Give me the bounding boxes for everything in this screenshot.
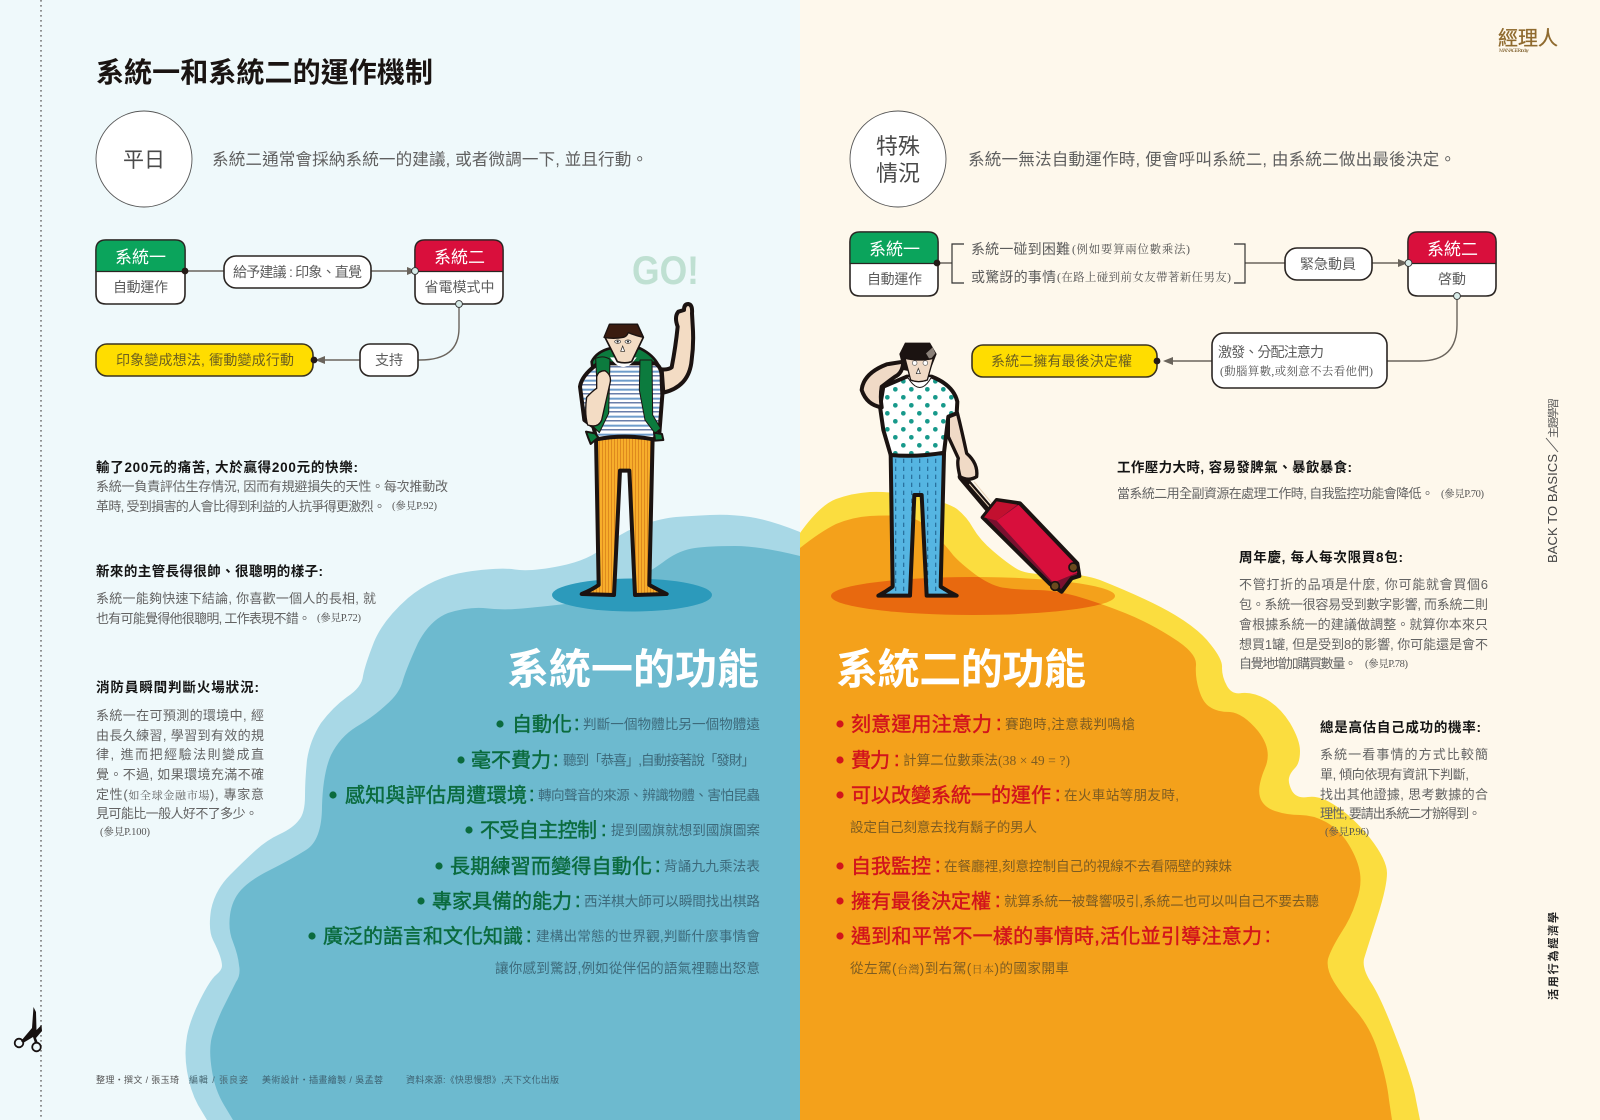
item: knowledge: 讓你感到驚訝,例如從伴侶的語氣裡聽出怒意 bbox=[495, 960, 760, 976]
item: involuntary: 不受自主控制 bbox=[480, 819, 597, 842]
item: final say: 就算系統一被聲響吸引,系統二也可以叫自己不要去聽 bbox=[1004, 893, 1319, 909]
item: perception: 轉向聲音的來源、辨識物體、害怕昆蟲 bbox=[538, 787, 760, 803]
item: practice bbox=[435, 855, 760, 878]
text: difficulty conditions: (在路上碰到前女友帶著新任男友) bbox=[1057, 270, 1231, 284]
illustration: hiker bbox=[580, 304, 693, 595]
text: stress: (參見P.70) bbox=[1441, 487, 1484, 500]
item: effortless bbox=[457, 749, 755, 772]
blob: system one outer bbox=[186, 515, 800, 1120]
text: overestimation: 單, 傾向依現有資訊下判斷, bbox=[1320, 767, 1469, 782]
text: firefighter: 覺。不過, 如果環境充滿不確 bbox=[96, 767, 264, 782]
item: automation: 判斷一個物體比另一個物體遠 bbox=[583, 717, 760, 732]
box: system one: 系統一 bbox=[115, 248, 166, 267]
bracket left bbox=[952, 244, 964, 283]
text: stress bbox=[1117, 459, 1484, 501]
text: difficulty conditions: 或驚訝的事情 bbox=[971, 269, 1056, 285]
box: system one: 自動運作 bbox=[113, 279, 168, 295]
credits: 整理‧撰文 / 張玉琦 bbox=[96, 1074, 179, 1085]
item: change system one: 設定自己刻意去找有鬍子的男人 bbox=[850, 819, 1037, 835]
text: stress: 當系統二用全副資源在處理工作時, 自我監控功能會降低。 bbox=[1117, 486, 1434, 501]
item: involuntary: : bbox=[601, 819, 607, 841]
side label: back to basics bbox=[1545, 398, 1560, 563]
item: automation: : bbox=[574, 713, 580, 735]
item: change system one: : bbox=[1055, 784, 1061, 806]
icon: special circle: 特殊 bbox=[876, 134, 920, 159]
credits: 美術設計‧插畫繪製 / 吳孟蓉 bbox=[262, 1074, 383, 1085]
text: purchase limit bbox=[1239, 549, 1488, 671]
box: allocate attention bbox=[1212, 333, 1387, 388]
item: automation: 自動化 bbox=[512, 713, 572, 736]
item: knowledge bbox=[308, 925, 760, 976]
side label: behavioral economics: 活用行為經濟學 bbox=[1546, 912, 1560, 1000]
item: effortless: 毫不費力 bbox=[471, 749, 551, 772]
text: special description: 系統一無法自動運作時, 便會呼叫系統二, 由系統二做出最後決定。 bbox=[968, 150, 1456, 169]
text: overestimation: 理性, 要請出系統二才辦得到。 bbox=[1320, 806, 1481, 821]
item: practice: : bbox=[655, 855, 661, 877]
blob: system one inner bbox=[210, 546, 800, 1120]
text: overestimation bbox=[1320, 719, 1488, 838]
item: expertise: 專家具備的能力 bbox=[432, 890, 572, 913]
side label: back to basics: BACK TO BASICS bbox=[1545, 454, 1560, 563]
pill: advice bbox=[224, 256, 371, 288]
item: effort: 費力 bbox=[851, 749, 890, 772]
box: system one bbox=[96, 240, 188, 304]
list: system one functions bbox=[308, 713, 760, 976]
text: loss aversion: 輸了200元的痛苦, 大於贏得200元的快樂: bbox=[96, 459, 358, 475]
text: overestimation: 總是高估自己成功的機率: bbox=[1320, 719, 1481, 735]
item: unusual events: 遇到和平常不一樣的事情時,活化並引導注意力 bbox=[851, 925, 1262, 948]
text: loss aversion: 系統一負責評估生存情況, 因而有規避損失的天性。每次推動改 bbox=[96, 479, 448, 494]
item: deliberate attention: 刻意運用注意力 bbox=[851, 713, 992, 736]
text: overestimation: 系統一看事情的方式比較簡 bbox=[1320, 747, 1488, 762]
credits: 資料來源:《快思慢想》,天下文化出版 bbox=[406, 1074, 559, 1085]
pill: impression becomes action bbox=[96, 344, 317, 376]
box: system two bbox=[412, 240, 503, 307]
item: unusual events: : bbox=[1265, 925, 1271, 947]
item: final say bbox=[836, 890, 1319, 913]
box: system two: 啓動 bbox=[1438, 271, 1466, 287]
icon: special circle bbox=[850, 111, 946, 207]
heading: GO: GO! bbox=[632, 249, 699, 293]
title: 系統一和系統二的運作機制 bbox=[96, 57, 433, 88]
box: allocate attention: 激發、分配注意力 bbox=[1218, 344, 1324, 360]
item: final say: : bbox=[995, 890, 1001, 912]
icon: weekday circle bbox=[96, 111, 192, 207]
text: purchase limit: 會根據系統一的建議做調整。就算你本來只 bbox=[1239, 617, 1488, 632]
credits bbox=[96, 1074, 559, 1085]
box: allocate attention: (動腦算數,或刻意不去看他們) bbox=[1220, 364, 1373, 378]
pill: advice: 給予建議 : 印象、直覺 bbox=[233, 264, 362, 280]
item: effortless: : bbox=[553, 749, 559, 771]
pill: impression becomes action: 印象變成想法, 衝動變成行動 bbox=[116, 352, 294, 368]
pill: support bbox=[360, 344, 418, 376]
item: involuntary bbox=[465, 819, 760, 842]
pill: support: 支持 bbox=[375, 352, 403, 368]
text: purchase limit: (參見P.78) bbox=[1365, 657, 1408, 670]
item: effort: (38 × 49 = ?) bbox=[998, 753, 1070, 769]
text: difficulty conditions bbox=[971, 241, 1231, 285]
logo: MANAGER today bbox=[1499, 48, 1529, 54]
flowchart: special bbox=[850, 232, 1496, 388]
item: deliberate attention: 賽跑時,注意裁判鳴槍 bbox=[1005, 716, 1135, 732]
text: new manager: 新來的主管長得很帥、很聰明的樣子: bbox=[96, 563, 323, 579]
text: difficulty conditions: (例如要算兩位數乘法) bbox=[1072, 242, 1190, 256]
list: system two functions bbox=[836, 713, 1319, 976]
text: purchase limit: 不管打折的品項是什麼, 你可能就會買個6 bbox=[1239, 577, 1488, 592]
text: firefighter: 見可能比一般人好不了多少。 bbox=[96, 806, 258, 821]
box: system two: 省電模式中 bbox=[424, 279, 494, 295]
item: change system one: 在火車站等朋友時, bbox=[1064, 787, 1179, 803]
pill: final decision: 系統二擁有最後決定權 bbox=[991, 353, 1132, 369]
text: firefighter: (參見P.100) bbox=[100, 825, 150, 838]
box: system one bbox=[850, 232, 940, 296]
item: involuntary: 提到國旗就想到國旗圖案 bbox=[611, 823, 760, 838]
item: self monitoring: 自我監控 bbox=[851, 855, 931, 878]
text: firefighter: 由長久練習, 學習到有效的規 bbox=[96, 728, 264, 743]
item: knowledge: 廣泛的語言和文化知識 bbox=[323, 925, 523, 948]
cut line bbox=[40, 0, 42, 1120]
flowchart: weekday bbox=[96, 240, 503, 376]
item: expertise bbox=[417, 890, 760, 913]
item: effortless: 聽到「恭喜」,自動接著說「發財」 bbox=[563, 752, 755, 768]
text: difficulty conditions: 系統一碰到困難 bbox=[971, 241, 1070, 257]
item: change system one: 可以改變系統一的運作 bbox=[851, 784, 1051, 807]
item: perception bbox=[329, 784, 760, 807]
text: new manager: (參見P.72) bbox=[317, 611, 362, 624]
heading: system two functions: 系統二的功能 bbox=[836, 646, 1086, 693]
text: firefighter: 律, 進而把經驗法則變成直 bbox=[96, 747, 264, 762]
text: weekday description: 系統二通常會採納系統一的建議, 或者微調一下, 並且行動。 bbox=[212, 150, 648, 169]
icon: special circle: 情況 bbox=[876, 161, 920, 186]
pill: mobilize: 緊急動員 bbox=[1300, 256, 1356, 272]
item: knowledge: 建構出常態的世界觀,判斷什麼事情會 bbox=[536, 928, 760, 944]
box: system one: 自動運作 bbox=[867, 271, 922, 287]
item: self monitoring: : bbox=[935, 855, 941, 877]
item: practice: 長期練習而變得自動化 bbox=[450, 855, 652, 878]
logo: 經理人 bbox=[1498, 27, 1558, 50]
text: loss aversion: (參見P.92) bbox=[392, 499, 438, 512]
side label: back to basics: 主題學習 bbox=[1547, 398, 1560, 438]
item: perception: : bbox=[529, 784, 535, 806]
connector lines bbox=[185, 271, 459, 360]
item: self monitoring: 在餐廳裡,刻意控制自己的視線不去看隔壁的辣妹 bbox=[944, 858, 1232, 874]
item: effort: 計算二位數乘法 bbox=[903, 753, 998, 768]
item: effort bbox=[836, 749, 1070, 772]
box: system two: 系統二 bbox=[434, 248, 485, 267]
item: perception: 感知與評估周遭環境 bbox=[345, 784, 527, 807]
text: firefighter bbox=[96, 679, 264, 838]
item: deliberate attention bbox=[836, 713, 1135, 736]
item: expertise: 西洋棋大師可以瞬間找出棋路 bbox=[584, 894, 760, 909]
text: overestimation: 找出其他證據, 思考數據的合 bbox=[1320, 787, 1488, 802]
item: knowledge: : bbox=[526, 925, 532, 947]
text: purchase limit: 包。系統一很容易受到數字影響, 而系統二則 bbox=[1239, 597, 1488, 612]
text: firefighter: 系統一在可預測的環境中, 經 bbox=[96, 708, 264, 723]
pill: final decision bbox=[972, 345, 1160, 377]
text: purchase limit: 想買1罐, 但是受到8的影響, 你可能還是會不 bbox=[1239, 637, 1488, 652]
item: unusual events bbox=[836, 925, 1271, 976]
item: expertise: : bbox=[575, 890, 581, 912]
text: new manager: 系統一能夠快速下結論, 你喜歡一個人的長相, 就 bbox=[96, 591, 376, 606]
text: stress: 工作壓力大時, 容易發脾氣、暴飲暴食: bbox=[1117, 459, 1352, 475]
ellipse: person shadow left bbox=[552, 578, 712, 612]
connector lines bbox=[938, 263, 1457, 361]
bracket right bbox=[1234, 244, 1245, 283]
box: system two: 系統二 bbox=[1427, 240, 1478, 259]
item: effort: : bbox=[894, 749, 900, 771]
text: firefighter: 消防員瞬間判斷火場狀況: bbox=[96, 679, 259, 695]
text: firefighter: 定性(如全球金融市場), 專家意 bbox=[96, 787, 264, 802]
text: new manager: 也有可能覺得他很聰明, 工作表現不錯。 bbox=[96, 611, 311, 626]
item: change system one bbox=[836, 784, 1179, 835]
heading: system one functions: 系統一的功能 bbox=[507, 646, 759, 693]
item: deliberate attention: : bbox=[996, 713, 1002, 735]
credits: 編輯 / 張良姿 bbox=[189, 1074, 248, 1085]
text: loss aversion: 革時, 受到損害的人會比得到利益的人抗爭得更激烈。 bbox=[96, 499, 386, 514]
item: final say: 擁有最後決定權 bbox=[851, 890, 991, 913]
box: system two bbox=[1405, 232, 1496, 299]
item: self monitoring bbox=[836, 855, 1232, 878]
item: practice: 背誦九九乘法表 bbox=[664, 859, 760, 874]
icon: weekday circle: 平日 bbox=[123, 149, 165, 172]
blob: system two outer bbox=[800, 492, 1420, 1120]
pill: mobilize bbox=[1285, 248, 1372, 280]
text: purchase limit: 自覺地增加購買數量。 bbox=[1239, 656, 1357, 671]
blob: system two inner bbox=[800, 516, 1392, 1120]
text: purchase limit: 周年慶, 每人每次限買8包: bbox=[1239, 549, 1403, 565]
item: automation bbox=[496, 713, 760, 736]
text: overestimation: (參見P.96) bbox=[1325, 825, 1370, 838]
text: new manager bbox=[96, 563, 376, 626]
text: loss aversion bbox=[96, 459, 448, 514]
icon: scissors bbox=[15, 1007, 42, 1051]
ellipse: person shadow right bbox=[831, 577, 1115, 615]
illustration: traveler bbox=[862, 343, 1079, 596]
box: system one: 系統一 bbox=[869, 240, 920, 259]
panel: right background bbox=[800, 0, 1600, 1120]
item: unusual events: 從左駕(台灣)到右駕(日本)的國家開車 bbox=[850, 960, 1069, 976]
panel: left background bbox=[0, 0, 800, 1120]
